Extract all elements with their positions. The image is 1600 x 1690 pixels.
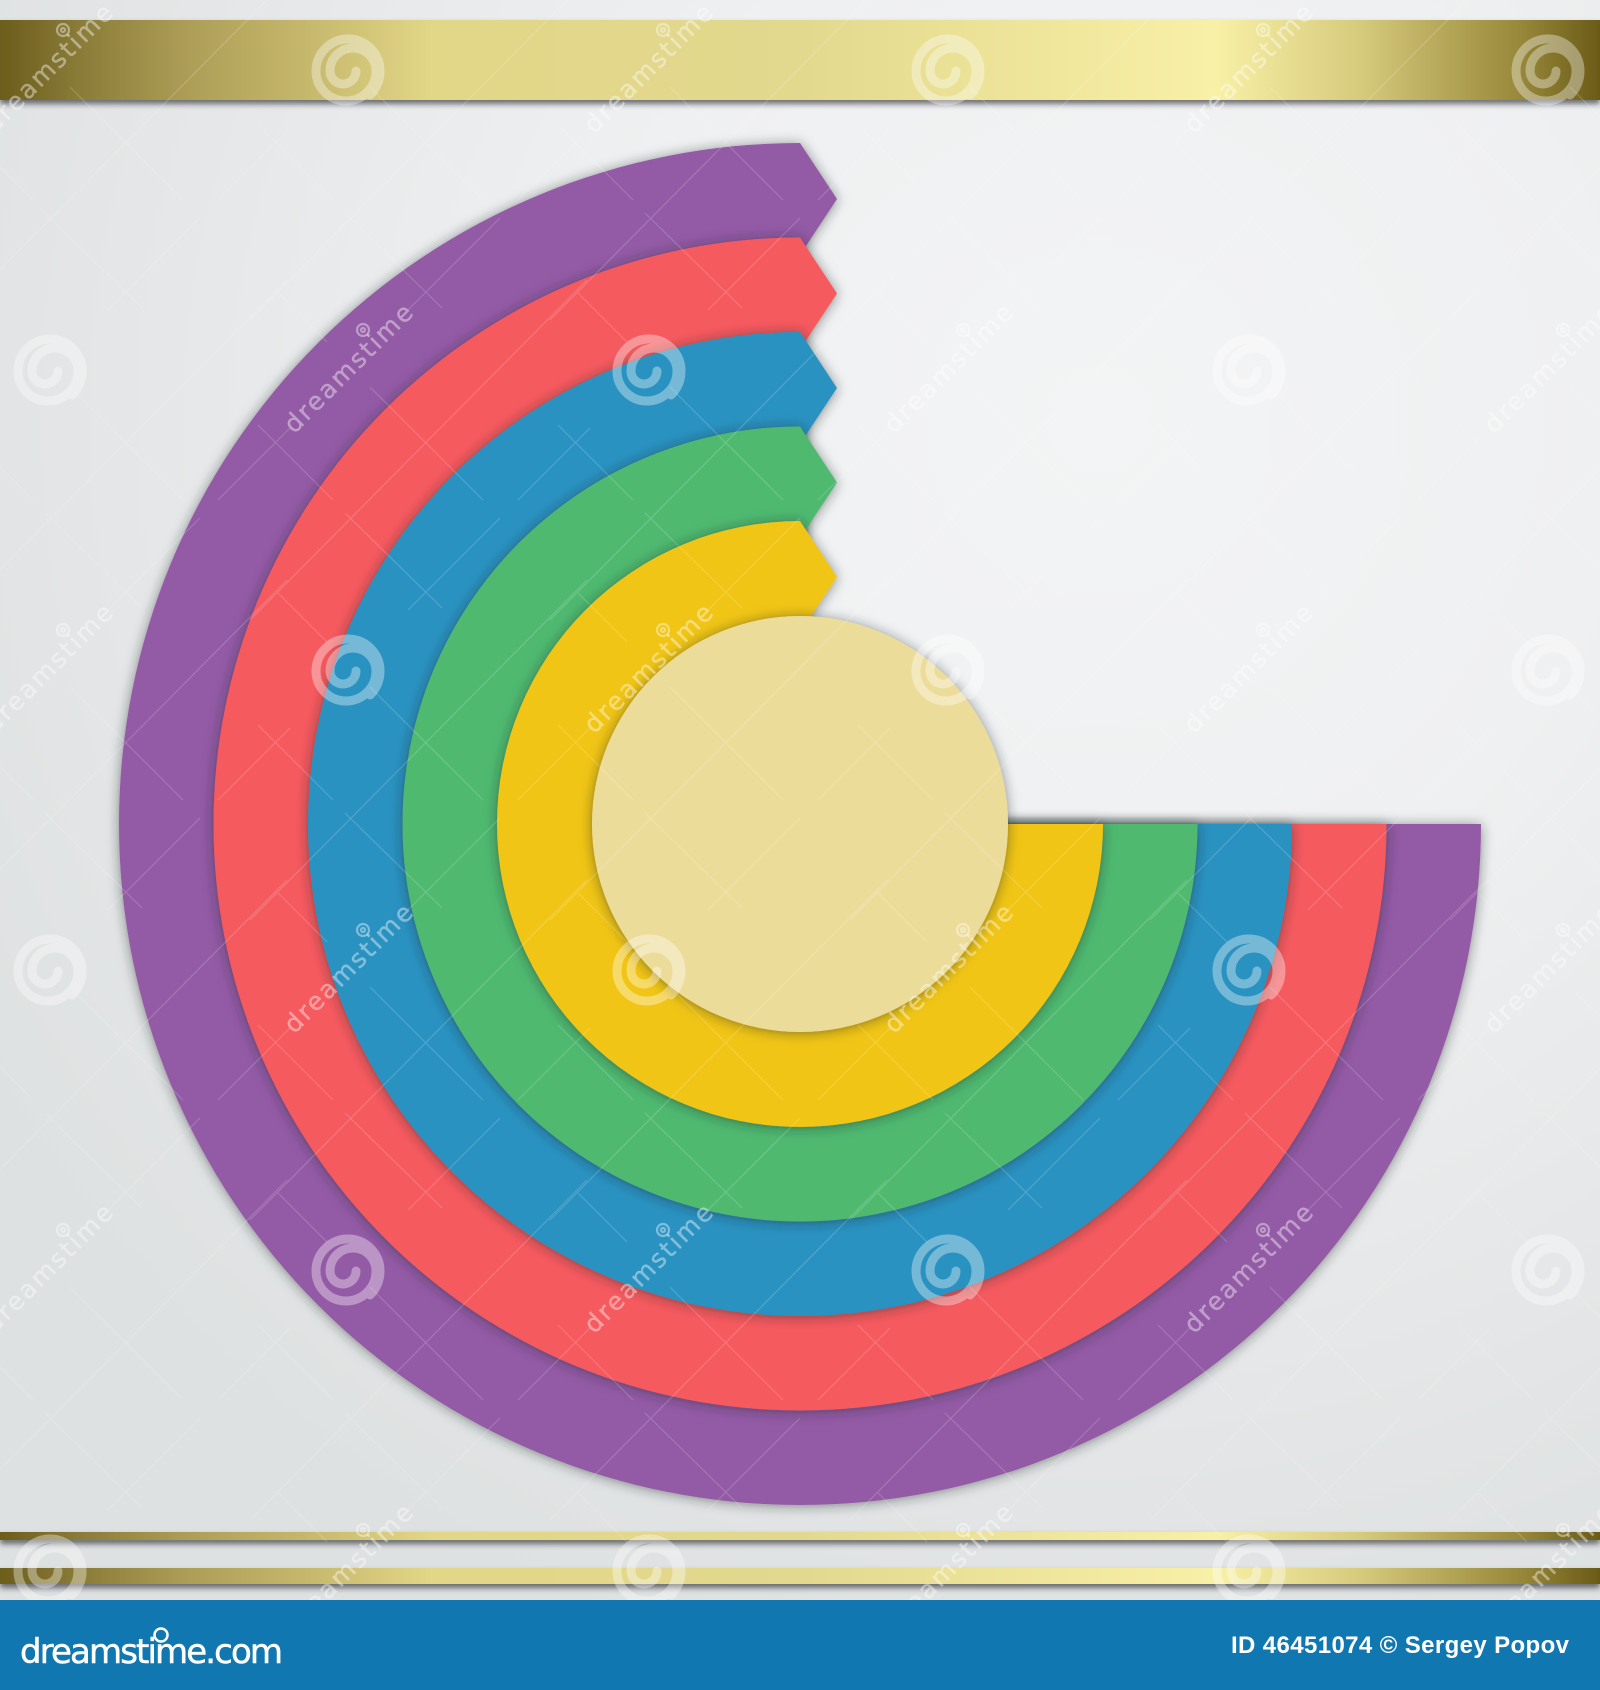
- ring: red: [214, 238, 1387, 1410]
- footer credit: ID 46451074 © Sergey Popov: [1231, 1632, 1570, 1659]
- watermark overlay: dreamstime: [578, 1198, 719, 1339]
- watermark overlay: dreamstime: [878, 1498, 1019, 1639]
- watermark overlay: dreamstime: [578, 598, 719, 739]
- watermark overlay: dreamstime: [1178, 0, 1319, 139]
- watermark overlay: dreamstime: [278, 298, 419, 439]
- watermark overlay: dreamstime: [1178, 1198, 1319, 1339]
- watermark overlay: dreamstime: [278, 1498, 419, 1639]
- footer logo icon: spiral: [154, 1628, 168, 1642]
- ring: blue: [308, 332, 1292, 1316]
- circular chart: concentric arrow rings: [119, 143, 1481, 1505]
- lower gold rule: thick: [0, 1568, 1600, 1584]
- footer bar: [0, 1600, 1600, 1690]
- ring: yellow: [497, 521, 1103, 1127]
- ring: green: [402, 426, 1198, 1221]
- watermark overlay: dreamstime: [278, 898, 419, 1039]
- watermark overlay: dreamstime: [878, 898, 1019, 1039]
- top gold banner: [0, 20, 1600, 100]
- watermark overlay: dreamstime: [878, 298, 1019, 439]
- watermark overlay: dreamstime: [578, 0, 719, 139]
- watermark overlay: dreamstime: [1178, 598, 1319, 739]
- ring: purple: [119, 143, 1481, 1505]
- footer logo text: dreamstime.com: [20, 1632, 283, 1672]
- center circle: [592, 616, 1008, 1032]
- lower gold rule: thin: [0, 1532, 1600, 1540]
